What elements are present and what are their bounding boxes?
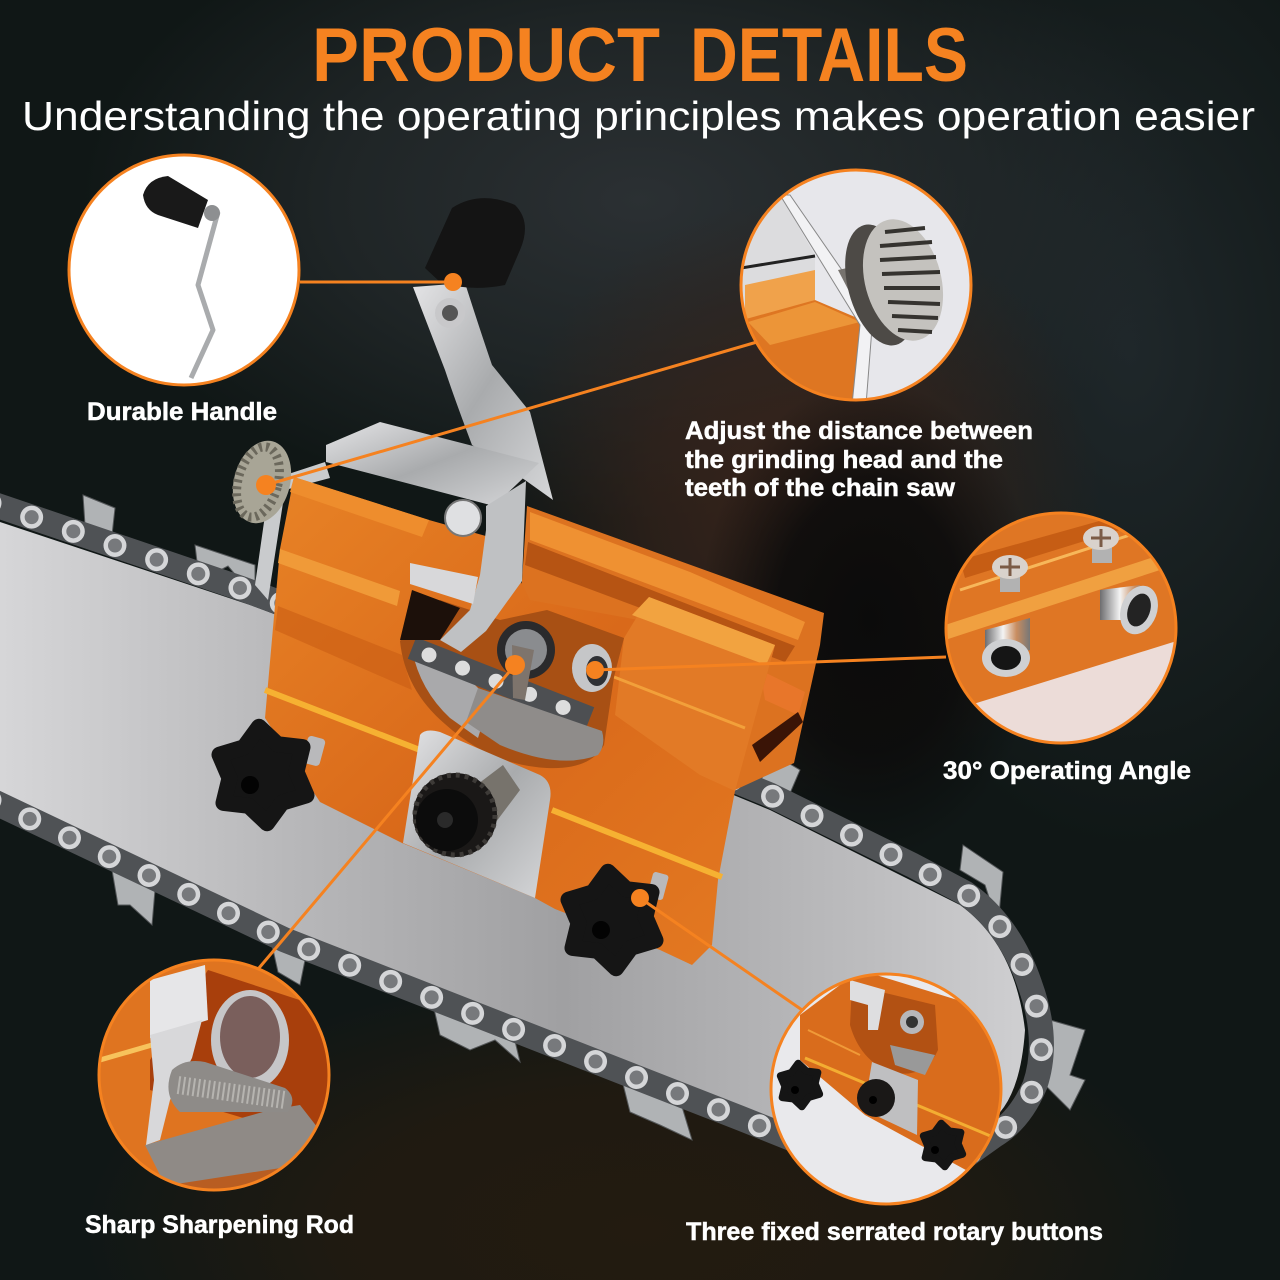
leader: buttons xyxy=(631,889,805,1012)
mini knobs xyxy=(772,1059,971,1171)
panel: sharpening rod detail xyxy=(99,960,335,1200)
title xyxy=(312,13,968,98)
panel: durable handle detail xyxy=(69,155,299,385)
front center knob xyxy=(413,765,520,857)
mini plate xyxy=(864,1062,918,1135)
main orange housing xyxy=(265,477,775,965)
strap eyelet xyxy=(435,298,465,328)
sharpening rod xyxy=(168,1061,292,1112)
title: PRODUCT xyxy=(312,13,660,98)
silver strap xyxy=(413,283,553,500)
label: adjust distance: Adjust the distance between xyxy=(685,417,1033,445)
yellow edge lines xyxy=(265,690,420,750)
knurled screw xyxy=(845,224,905,346)
guide bar xyxy=(0,522,1025,1165)
black grip xyxy=(425,198,525,288)
silver top bracket xyxy=(326,422,539,652)
leader lines and dots xyxy=(256,273,946,1012)
panel: adjust distance detail xyxy=(735,170,971,405)
mini bracket xyxy=(850,980,885,1030)
leader: rod xyxy=(259,655,525,968)
lower chain xyxy=(0,800,810,1146)
orange block xyxy=(748,300,860,398)
shaft xyxy=(838,268,848,290)
left star knob xyxy=(202,717,326,833)
upper chain xyxy=(0,503,1041,1160)
right raised block xyxy=(615,597,775,791)
label: operating angle: 30° Operating Angle xyxy=(943,757,1191,785)
screw left xyxy=(992,555,1028,592)
adjustment hole xyxy=(572,644,612,692)
mini window xyxy=(850,985,938,1074)
label: durable handle: Durable Handle xyxy=(87,398,277,426)
panel: operating angle detail xyxy=(945,513,1180,745)
chainsaw bar and chain xyxy=(0,495,1085,1165)
label: sharpening rod: Sharp Sharpening Rod xyxy=(85,1211,354,1239)
metal guide plate xyxy=(466,688,603,761)
screw right xyxy=(1083,526,1119,563)
grommet xyxy=(211,990,289,1090)
label: adjust distance: teeth of the chain saw xyxy=(685,474,956,502)
bushing right xyxy=(1100,585,1158,634)
silver angle xyxy=(780,195,873,405)
handle wire xyxy=(191,212,218,378)
plate xyxy=(145,1105,316,1184)
thumb screw xyxy=(224,434,330,600)
mini orange body xyxy=(800,970,1005,1175)
silver block xyxy=(742,200,815,307)
leader: handle xyxy=(300,273,462,291)
label: adjust distance xyxy=(685,417,1033,502)
bright rail xyxy=(945,555,1160,640)
handle knob xyxy=(143,176,208,228)
light surface xyxy=(976,642,1174,742)
left raised block highlight xyxy=(290,477,429,537)
sharpener handle xyxy=(413,198,553,500)
leader: adjust screw xyxy=(256,342,757,495)
subtitle: Understanding the operating principles makes operation easier xyxy=(22,93,1255,139)
rear rail xyxy=(518,506,824,790)
bushing left xyxy=(982,618,1030,677)
label: adjust distance: the grinding head and the xyxy=(685,446,1003,474)
right star knob xyxy=(551,862,673,978)
silver front plate xyxy=(403,731,551,898)
label: rotary buttons: Three fixed serrated rotary buttons xyxy=(686,1218,1103,1246)
yellow edge xyxy=(100,1045,152,1060)
grinding rod xyxy=(497,621,555,679)
panel: rotary buttons detail xyxy=(771,970,1005,1204)
window cutout xyxy=(400,600,624,768)
title: DETAILS xyxy=(690,13,968,98)
chain teeth xyxy=(83,495,1085,1140)
leader: angle xyxy=(586,657,946,679)
dark recess xyxy=(150,970,335,1130)
sharpener body xyxy=(202,422,824,978)
silver bracket xyxy=(150,965,208,1038)
